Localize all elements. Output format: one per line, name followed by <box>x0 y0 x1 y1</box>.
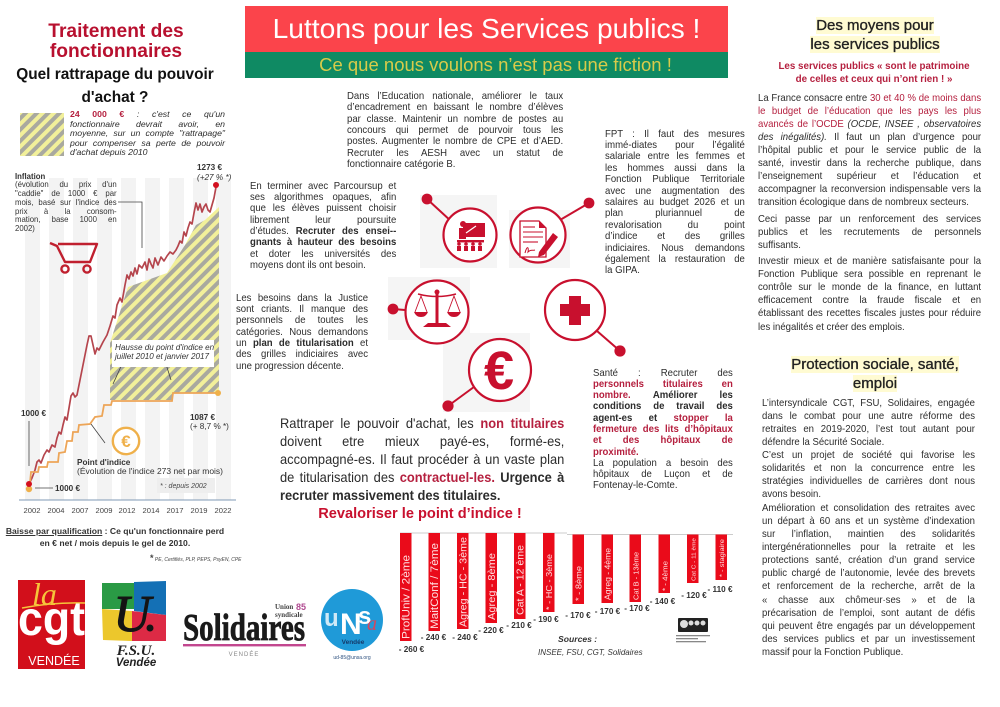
text: rattraper le pouvoir d'achat: recruter massivement des titulaires. <box>280 487 500 503</box>
bar values: - 240 € <box>452 633 478 642</box>
text: intersyndicale: retraites en 2019-2020, l’est tout autant pour <box>762 424 975 435</box>
text: sante: Fontenay-le-Comte. <box>593 480 677 491</box>
text: education nationale <box>347 91 563 170</box>
heading: des moyens pour les services publics: Des moyens pour <box>816 17 934 34</box>
heading: quel rattrapage: d'achat ? <box>82 89 148 106</box>
icon: euro coin: € <box>121 432 131 451</box>
inflation and index chart <box>19 113 236 515</box>
text: justice: un plan de titularisation et <box>236 338 368 349</box>
logo: FSU: Vendée <box>116 657 157 669</box>
inflation note: mois, basé sur l'indice des <box>15 198 117 207</box>
text: sources: INSEE, FSU, CGT, Solidaires <box>538 648 643 657</box>
text: education nationale: concours qui permet de pourvoir tous les <box>347 125 563 136</box>
text: intersyndicale: protections santé, création d’un grand service <box>762 555 975 566</box>
bar chart: loss by qualification <box>399 532 733 654</box>
logo: Solidaires: 85 <box>296 602 306 612</box>
text: parcoursup: librement leur poursuite <box>250 215 396 226</box>
logo: FSU: F.S.U. <box>116 643 155 659</box>
text: la france consacre: La France consacre entre 30 et 40 % de moins dans <box>758 92 981 104</box>
bars <box>400 533 727 641</box>
logo: FSU: U <box>113 586 154 643</box>
bar names: * - 4ème <box>660 561 670 591</box>
text: justice: Les besoins dans la Justice <box>236 292 368 304</box>
logo: CGT: cgt <box>18 593 85 646</box>
bar names: * - 8ème <box>574 565 584 601</box>
logo: FSU <box>102 581 166 669</box>
text: education nationale: d’encadrement en baissant le nombre d’élèves <box>347 102 563 113</box>
text: investir mieux: établissant des recettes fiscales justes pour réduire <box>758 308 981 319</box>
inflation note: mation, base 1000 en <box>15 215 117 224</box>
text: FPT <box>605 128 745 276</box>
legend text: 24 000 euros: 24 000 € : c'est ce qu'un <box>70 109 225 119</box>
text: FPT: également la restauration de <box>605 254 745 265</box>
heading: quel rattrapage <box>16 66 214 106</box>
point d'indice note: Point d'indice <box>77 458 131 467</box>
text: la france consacre: l’enseignement supérieur et l’éducation et <box>758 171 981 182</box>
icon: euro coin <box>113 428 139 454</box>
value labels <box>21 163 232 493</box>
text: intersyndicale: avons besoin. <box>762 489 821 500</box>
value labels: 1273 € <box>197 163 222 172</box>
start and end dots <box>26 486 32 492</box>
logo: CGT <box>18 576 85 669</box>
bar names: * - HC - 3ème <box>545 553 554 610</box>
footnote box <box>157 478 215 493</box>
bar values: - 190 € <box>533 615 559 624</box>
text: justice: catégories. Nous demandons <box>236 327 368 338</box>
text: FPT: Fonction Publique Territoriale <box>605 174 745 185</box>
text: la france consacre: santé, investir dans la recherche publique, dans <box>758 158 981 169</box>
text: sante: et des hôpitaux de <box>593 435 733 446</box>
heading: revaloriser le point d'indice: Revaloriser le point d’indice ! <box>318 506 522 522</box>
text: intersyndicale: Amélioration et consolidation des retraites avec <box>762 503 975 514</box>
text: sante <box>593 368 733 491</box>
text: FPT: revalorisation du point <box>605 220 745 231</box>
text: intersyndicale: des services publics et par un investissement <box>762 634 975 645</box>
text: rattraper le pouvoir d'achat <box>280 415 564 503</box>
text: baisse par qualification: Baisse par qualification : Ce qu'un fonctionnaire perd <box>6 526 224 536</box>
value labels: 1000 € <box>21 409 46 418</box>
text: sources <box>538 634 643 657</box>
text: justice <box>236 292 368 372</box>
logo: Solidaires: Solidaires <box>183 607 305 649</box>
logo: Solidaires <box>183 602 306 658</box>
leader lines <box>29 202 171 488</box>
text: rattraper le pouvoir d'achat: de titularisation des contractuel-les. Urgence à <box>280 469 564 485</box>
bar values: - 140 € <box>650 597 676 606</box>
point d'indice note: (Évolution de l'indice 273 net par mois) <box>77 466 223 476</box>
text: rattraper le pouvoir d'achat: accompagné-es. Il faut procéder à un vaste plan <box>280 451 564 467</box>
legend text: 24 000 euros: fonctionnaire devrait avoir, en <box>70 119 225 129</box>
text: sante: La population a besoin des <box>593 458 733 469</box>
year labels <box>24 506 231 515</box>
heading: protection sociale <box>791 356 959 392</box>
text: justice: sont criants. Il manque des <box>236 304 368 315</box>
bar names: Cat B - 13ème <box>634 552 640 600</box>
subheading: patrimoine: Les services publics « sont le patrimoine <box>778 61 970 72</box>
text: justice: personnels de toutes les <box>236 315 368 326</box>
year labels: 2014 <box>143 506 159 515</box>
text: investir mieux: Fonction Publique sera possible en reprenant le <box>758 269 981 280</box>
logo: Solidaires: syndicale <box>275 611 303 619</box>
icon: teacher in class <box>422 194 496 262</box>
icon: euro: € <box>484 341 514 401</box>
logo: UNSA: ud-85@unsa.org <box>333 655 371 661</box>
text: investir mieux: Investir mieux et de manière satisfaisante pour la <box>758 256 981 266</box>
heading: traitement des fonctionnaires: Traitement des <box>48 21 184 42</box>
text: la france consacre <box>758 92 982 208</box>
text: sante: nombre. Améliorer les <box>593 390 733 401</box>
inflation line <box>29 187 216 484</box>
text: parcoursup: d’études. Recruter des ensei-- <box>250 226 396 237</box>
year labels: 2012 <box>119 506 135 515</box>
text: justice: une progression décente. <box>236 361 344 372</box>
inflation note: "caddie" de 1000 € par <box>15 189 117 198</box>
text: intersyndicale: sur l’inflation, maintien des solidarités <box>762 529 975 540</box>
text: FPT: la GIPA. <box>605 265 640 276</box>
text: intersyndicale <box>762 398 975 658</box>
bar values <box>399 585 733 654</box>
text: la france consacre: transition écologique dans de nombreux secteurs. <box>758 197 969 208</box>
text: parcoursup: que les élèves puissent choisir <box>250 203 396 214</box>
text: parcoursup: moyens dont ils ont besoin. <box>250 260 366 271</box>
year labels: 2009 <box>96 506 112 515</box>
year labels: 2022 <box>215 506 231 515</box>
bar names: Cat A - 12 ème <box>514 545 526 615</box>
text: parcoursup: En terminer avec Parcoursup et <box>250 180 396 192</box>
text: la france consacre: le budget de l’éducation que les pays les plus <box>758 106 981 117</box>
year labels: 2017 <box>167 506 183 515</box>
text: investir mieux: les inégalités et créer des emplois. <box>758 322 905 333</box>
text: sante: personnels titulaires en <box>593 379 733 390</box>
text: FPT: immé-diates pour l’égalité <box>605 140 745 151</box>
text: baisse par qualification <box>6 526 224 548</box>
icon: shopping cart <box>50 243 97 273</box>
text: ceci passe par: suffisants. <box>758 240 801 251</box>
text: education nationale: par classe. Maintenir un nombre de postes au <box>347 114 563 125</box>
logo: CGT: VENDÉE <box>28 653 80 668</box>
bar values: - 210 € <box>506 621 532 630</box>
bar names: MaitConf / 7ème <box>429 543 441 629</box>
text: intersyndicale: précarisation de l’emploi, sont autant de défis <box>762 608 975 619</box>
text: ceci passe par: publics et les recrutements de personnels <box>758 227 981 238</box>
bar values: - 170 € <box>595 607 621 616</box>
text: FPT: les hommes aussi dans la <box>605 163 745 174</box>
text: sante: Santé : Recruter des <box>593 368 733 378</box>
value labels: 1087 € <box>190 413 215 422</box>
bar values: - 120 € <box>681 591 707 600</box>
footnote box: * : depuis 2002 <box>160 483 207 490</box>
callout: point d'indice increases <box>112 340 215 367</box>
text: la france consacre: avancés de l’OCDE (OCDE, INSEE , observatoires <box>758 119 981 130</box>
value labels: 1000 € <box>55 484 80 493</box>
legend text: 24 000 euros <box>70 109 226 157</box>
text: intersyndicale: défendre la Sécurité Sociale. <box>762 437 884 448</box>
text: ceci passe par <box>758 214 981 251</box>
bar values: - 240 € <box>421 633 447 642</box>
bar names: Agreg - 8ème <box>486 553 498 620</box>
logo: UNSA: Vendée <box>342 639 365 646</box>
icon: creative commons badge <box>676 618 710 642</box>
icon: euro <box>442 339 531 412</box>
subtitle banner: Ce que nous voulons n’est pas une fiction ! <box>319 54 672 75</box>
text: education nationale: postes. Augmenter le nombre de CPE et d’AED. <box>347 136 563 147</box>
bar names: Agreg - 4ème <box>604 547 612 600</box>
value labels: (+27 % *) <box>197 173 232 182</box>
heading: traitement des fonctionnaires: fonctionnaires <box>50 41 182 62</box>
year labels: 2007 <box>72 506 88 515</box>
text: FPT: avec une augmentation des <box>605 186 745 197</box>
text: rattraper le pouvoir d'achat: doivent etre mieux payé-es, formé-es, <box>280 433 564 449</box>
icon: scales of justice <box>388 280 468 344</box>
value labels: (+ 8,7 % *) <box>190 422 229 431</box>
text: ceci passe par: Ceci passe par un renforcement des services <box>758 214 981 224</box>
heading: traitement des fonctionnaires <box>48 21 184 62</box>
heading: quel rattrapage: Quel rattrapage du pouvoir <box>16 66 214 83</box>
text: parcoursup: gnants à hauteur des besoins <box>250 237 396 248</box>
text: investir mieux: efficacement contre la fraude fiscale et en <box>758 295 981 306</box>
year bands <box>25 178 231 500</box>
text: intersyndicale: qui peuvent être engagés par un développement <box>762 621 975 632</box>
text: intersyndicale: public chargé de l’autonomie, levée des brevets <box>762 568 975 579</box>
callout: point d'indice increases: Hausse du point d'indice en <box>115 343 215 352</box>
subtitle banner <box>245 52 728 78</box>
logo: Solidaires: VENDÉE <box>229 651 259 658</box>
year labels: 2019 <box>191 506 207 515</box>
text: la france consacre: des inégalités). Il faut un plan d’urgence pour <box>758 132 981 143</box>
text: investir mieux: contrôle sur le monde de la finance, en luttant <box>758 282 981 293</box>
callout: point d'indice increases: juillet 2010 et janvier 2017 <box>114 352 210 361</box>
logo: UNSA: s <box>358 603 371 630</box>
text: intersyndicale: dans le combat pour une autre réforme des <box>762 411 975 422</box>
legend text: 24 000 euros: pour compenser sa perte de pouvoir <box>70 138 225 148</box>
text: sante: proximité. <box>593 447 639 458</box>
logo: UNSA <box>321 589 383 661</box>
text: intersyndicale: C’est un projet de société qui favorise les <box>762 450 975 461</box>
text: education nationale: fonctionnaire catégorie B. <box>347 159 455 170</box>
legend text: 24 000 euros: moyenne, sur un compte "rattrapage" <box>70 128 225 138</box>
text: intersyndicale: stratégies individuelles de carrières dont nous <box>762 476 975 487</box>
text: intersyndicale: massif pour la Fonction Publique. <box>762 647 903 658</box>
bar values: - 170 € <box>624 604 650 613</box>
title banner: Luttons pour les Services publics ! <box>273 12 700 44</box>
bar names: * - stagiaire <box>719 539 726 577</box>
text: FPT: salariale entre les femmes et <box>605 151 745 162</box>
year labels: 2002 <box>24 506 40 515</box>
text: sante: hôpitaux de Luçon et de <box>593 469 733 480</box>
text: intersyndicale: solidarités et non la concurrence entre les <box>762 463 975 474</box>
footnote: categories: * PE, Certifiés, PLP, PEPS, PsyEN, CPE <box>150 553 242 563</box>
text: parcoursup <box>250 180 396 271</box>
title banner <box>245 6 728 52</box>
text: baisse par qualification: en € net / mois depuis le gel de 2010. <box>40 538 190 548</box>
hatched legend swatch <box>20 113 64 156</box>
text: intersyndicale: un départ à 60 ans et un système d’indexation <box>762 516 975 527</box>
inflation note: Inflation <box>15 172 45 180</box>
text: intersyndicale: et renforcement de la recherche, arrêt de la <box>762 581 975 592</box>
text: la france consacre: l’hôpital public et pour le service public de la <box>758 145 981 156</box>
bar names <box>400 537 726 639</box>
bar names: ProfUniv / 2ème <box>400 555 412 639</box>
text: rattraper le pouvoir d'achat: Rattraper le pouvoir d'achat, les non titulaires <box>280 415 564 431</box>
inflation note: (évolution du prix d'un <box>15 180 117 189</box>
text: FPT: FPT : Il faut des mesures <box>605 128 745 140</box>
text: intersyndicale: intergénérationnelles pour la retraite et les <box>762 542 975 553</box>
logo: UNSA: u <box>324 605 339 632</box>
text: sante: conditions de travail des <box>593 401 733 412</box>
text: investir mieux <box>758 256 982 333</box>
text: justice: des grilles indiciaires avec <box>236 349 368 360</box>
year labels: 2004 <box>48 506 64 515</box>
point d'indice note <box>77 458 223 476</box>
bar names: Cat C - 11 ème <box>692 538 698 581</box>
bar values: - 260 € <box>399 645 425 654</box>
bar values: - 220 € <box>478 626 504 635</box>
text: intersyndicale: « chasse aux chômeur·ses » et de la <box>762 595 975 606</box>
text: FPT: salaires au budget 2026 et un <box>605 197 745 208</box>
central icons <box>388 194 626 412</box>
logo: CGT: la <box>32 576 57 612</box>
heading: des moyens pour les services publics: les services publics <box>810 36 940 53</box>
inflation note <box>15 172 117 233</box>
logo: UNSA: N <box>340 608 362 641</box>
logo: UNSA: a <box>367 613 377 635</box>
bar values: - 170 € <box>565 611 591 620</box>
text: parcoursup: et doter les universités des <box>250 249 396 260</box>
inflation note: 2002) <box>15 224 35 233</box>
text: sources: Sources : <box>558 634 597 644</box>
text: FPT: indiciaires. Nous demandons <box>605 243 745 254</box>
subheading: patrimoine: de celles et ceux qui n’ont rien ! » <box>796 74 952 85</box>
inflation note: prix à la consom- <box>15 206 117 216</box>
text: la france consacre: accompagner la reconversion indispensable vers la <box>758 184 981 195</box>
text: education nationale: Recruter les AESH avec un statut de <box>347 148 563 159</box>
text: education nationale: Dans l’Education nationale, améliorer le taux <box>347 91 563 102</box>
point d'indice line <box>30 393 217 483</box>
text: sante: agent-es et stopper la <box>593 413 733 424</box>
axis <box>19 499 236 501</box>
logo: Solidaires: Union <box>275 603 293 611</box>
icon: document and pen <box>510 198 594 262</box>
bar values: - 110 € <box>707 585 733 594</box>
text: sante: fermeture des lits d’hôpitaux <box>593 424 733 435</box>
heading: protection sociale: emploi <box>853 374 897 392</box>
heading: protection sociale: Protection sociale, santé, <box>791 356 959 373</box>
text: FPT: plan pluriannuel de <box>605 208 745 219</box>
text: parcoursup: ses algorithmes opaques, afin <box>250 192 396 203</box>
icon backgrounds <box>388 195 570 412</box>
bar names: Agreg - HC - 3ème <box>458 537 470 627</box>
hatched gap area <box>110 207 219 400</box>
legend text: 24 000 euros: d'achat depuis 2010 <box>70 147 148 157</box>
text: FPT: d’indice et des grilles <box>605 231 745 242</box>
icon: medical cross <box>545 280 626 357</box>
subheading: patrimoine <box>778 61 970 85</box>
heading: des moyens pour les services publics <box>810 17 940 53</box>
text: intersyndicale: L’intersyndicale CGT, FSU, Solidaires, engagée <box>762 398 975 408</box>
